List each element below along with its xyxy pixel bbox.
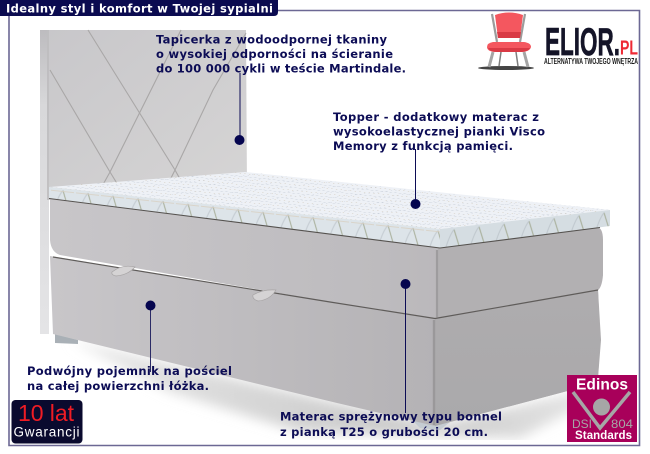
callout: storage [27,364,232,393]
pointer: topper [410,149,420,209]
badge: Edinos standards: DSI [572,417,592,431]
callout: topper: Memory z funkcją pamięci. [333,139,513,153]
badge: Edinos standards [567,375,637,442]
topper [49,172,610,248]
badge: 10 year warranty [12,400,82,444]
callout: mattress [280,410,502,439]
callout: storage: Podwójny pojemnik na pościel [27,364,232,378]
lower storage box [50,256,601,426]
icon: red chair [478,12,534,70]
callout: upholstery: do 100 000 cykli w teście Martindale. [156,62,406,76]
callout: upholstery [156,32,406,76]
pointer: storage [146,300,156,372]
feet [55,334,450,430]
title bar: Idealny styl i komfort w Twojej sypialni [6,2,273,16]
badge: 10 year warranty: 10 lat [18,400,75,426]
floor shadow [90,345,567,440]
handle right [253,290,276,301]
pointer: upholstery [234,73,244,145]
seam between boxes [53,257,598,318]
callout: storage: na całej powierzchni łóżka. [27,379,209,393]
callout: mattress: z pianką T25 o grubości 20 cm. [280,425,488,439]
callout: mattress: Materac sprężynowy typu bonnel [280,410,502,424]
headboard [40,30,247,334]
callout: upholstery: Tapicerka z wodoodpornej tkaniny [156,32,388,46]
upper mattress box [50,199,603,318]
handle left [112,266,135,276]
logo domain: PL [620,38,638,60]
badge: Edinos standards: Edinos [576,376,628,394]
badge: Edinos standards: Standards [575,430,632,442]
pointer: mattress [400,279,410,413]
callout: topper [333,110,545,153]
callout: upholstery: o wysokiej odporności na ścieranie [156,47,393,61]
badge: Edinos standards: 804 [611,417,633,431]
callout: topper: wysokoelastycznej pianki Visco [333,124,545,138]
bed illustration [40,30,610,438]
badge: 10 year warranty: Gwarancji [14,424,80,440]
logo: Elior.pl [478,12,638,70]
callout: topper: Topper - dodatkowy materac z [333,110,539,124]
